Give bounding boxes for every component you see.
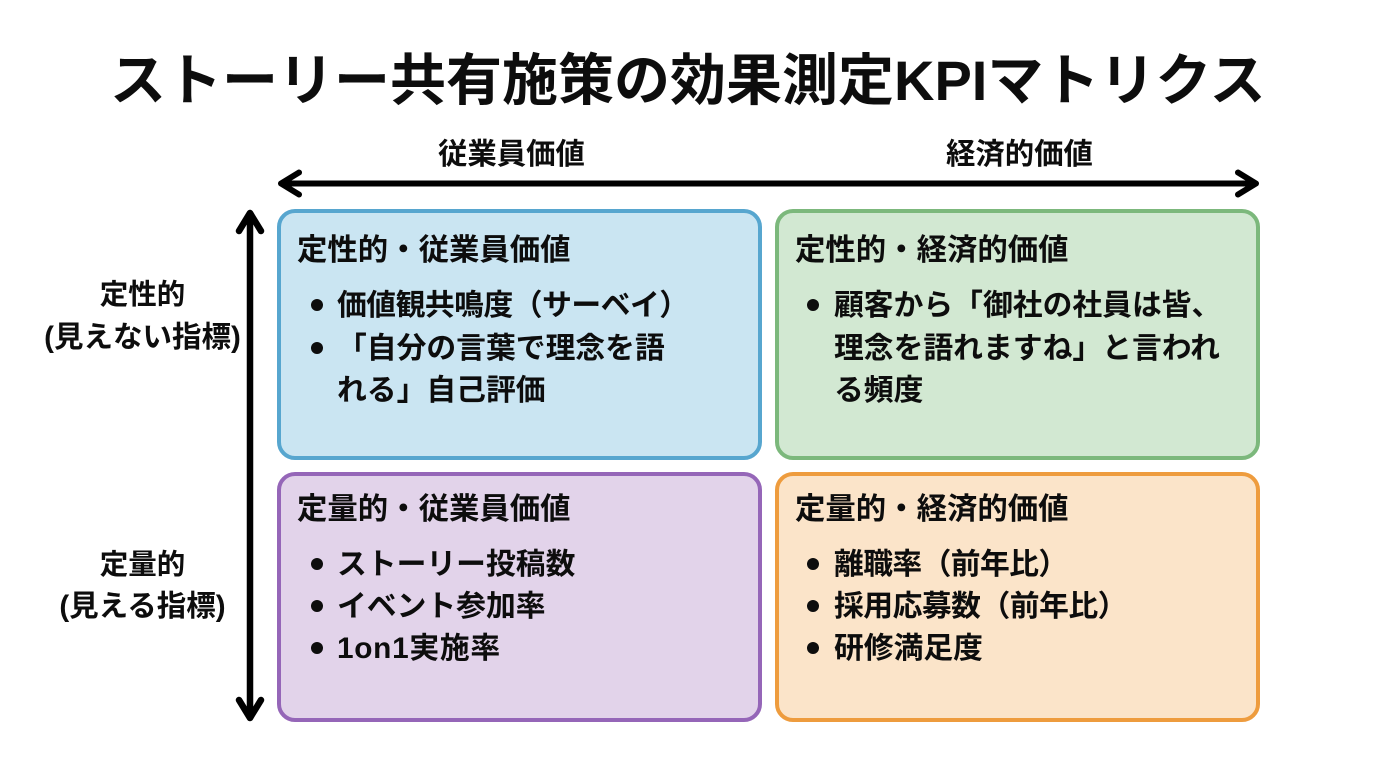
bullet list: 理念を語れますね」と言われ (834, 332, 1220, 365)
bullet list: 1on1実施率 (337, 632, 501, 665)
bullet list: れる」自己評価 (337, 374, 546, 407)
arrow: vertical axis (236, 210, 264, 722)
bullet list: イベント参加率 (337, 590, 546, 623)
column label: economic value: 経済的価値 (946, 138, 1093, 171)
title: ストーリー共有施策の効果測定KPIマトリクス (110, 49, 1266, 112)
panel heading: 定量的・経済的価値 (795, 492, 1069, 526)
row label: quantitative: 定量的 (100, 549, 185, 581)
row label: visible indicators: (見える指標) (59, 590, 226, 623)
bullet list: 価値観共鳴度（サーベイ） (337, 289, 689, 322)
bullet list (311, 289, 689, 407)
panel: qualitative economic value (775, 209, 1260, 460)
bullet list: 離職率（前年比） (834, 548, 1068, 581)
panel heading: 定性的・従業員価値 (297, 233, 571, 267)
panel: qualitative employee value (277, 209, 762, 460)
bullet list (311, 548, 575, 665)
panel heading: 定性的・経済的価値 (795, 233, 1069, 267)
arrow: horizontal axis (278, 170, 1259, 198)
bullet list: ストーリー投稿数 (337, 548, 575, 581)
panel: quantitative economic value (775, 472, 1260, 722)
bullet list: る頻度 (834, 374, 923, 407)
bullet list (807, 548, 1127, 665)
panel: quantitative employee value (277, 472, 762, 722)
bullet list: 「自分の言葉で理念を語 (337, 332, 665, 365)
panel heading: 定量的・従業員価値 (297, 492, 571, 526)
row label: invisible indicators: (見えない指標) (44, 321, 241, 354)
column label: employee value: 従業員価値 (438, 138, 585, 171)
bullet list: 研修満足度 (834, 632, 983, 665)
bullet list: 顧客から「御社の社員は皆、 (834, 289, 1221, 322)
row label: qualitative: 定性的 (100, 279, 185, 311)
bullet list: 採用応募数（前年比） (834, 590, 1127, 623)
bullet list (807, 289, 1221, 407)
